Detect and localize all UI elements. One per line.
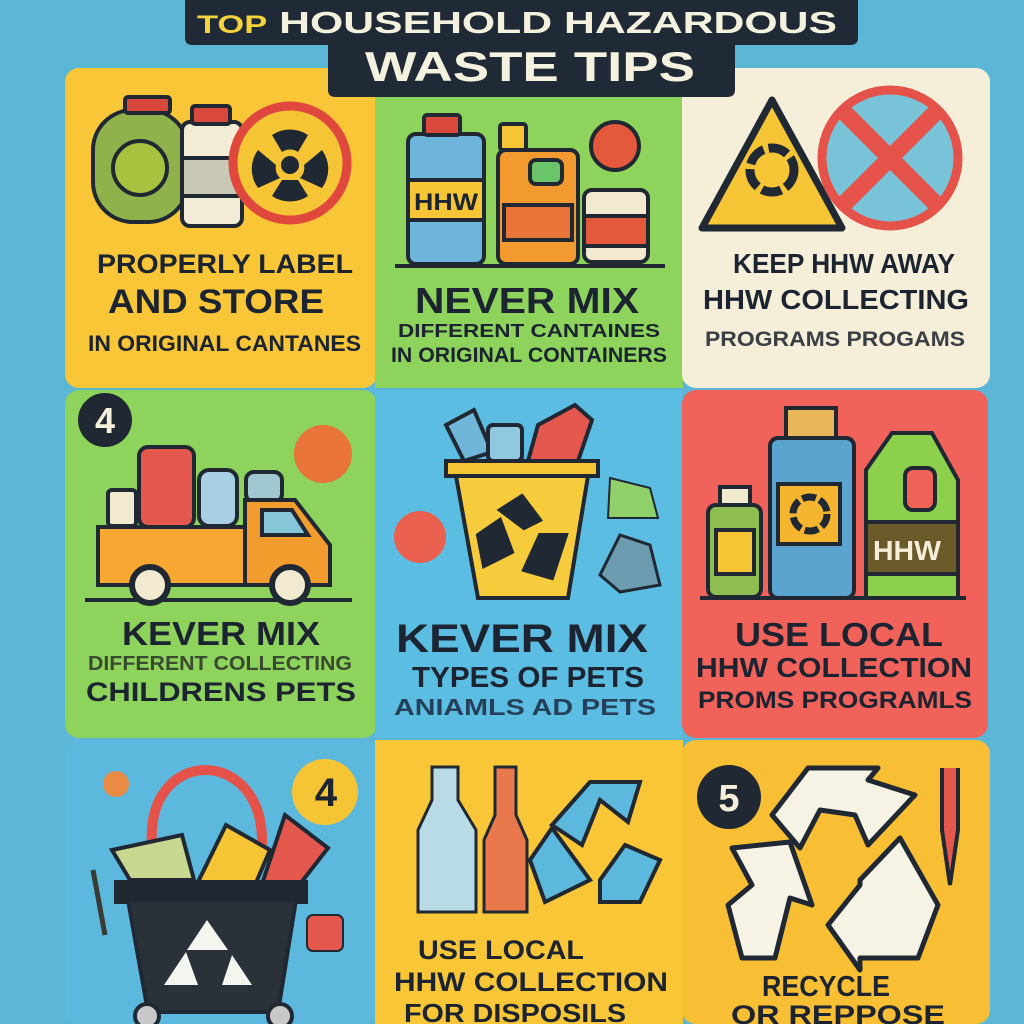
panel: use local programs [682,390,988,738]
icon: recycling arrows [530,782,660,902]
icon: bag [600,535,660,592]
icon: stick [93,870,105,935]
panel: use local collection [375,740,683,1024]
text: HHW collection: HHW COLLECTION [394,967,668,997]
badge: number 4: 4 [95,400,115,441]
icon: two bottles [418,767,527,912]
badge: number 4 [292,759,358,825]
text: programs: PROMS PROGRAMLS [698,687,972,714]
text: HHW collection: HHW COLLECTION [696,652,972,683]
heading: children's pets: CHILDRENS PETS [86,677,356,707]
heading: use local: USE LOCAL [735,616,943,653]
title: line two: WASTE TIPS [365,43,695,90]
text: programs: PROGRAMS PROGAMS [705,328,965,351]
panel: trash cart [65,740,377,1024]
title banner [185,0,858,97]
heading: properly label: PROPERLY LABEL [97,249,353,279]
icon: containers and biohazard sign [93,97,347,226]
panel: bin [375,390,683,738]
title: line one: TOP HOUSEHOLD HAZARDOUS [197,5,837,40]
heading: recycle: RECYCLE [762,971,890,1003]
icon: small red canister [307,915,343,951]
text: types of pets: TYPES OF PETS [412,662,644,694]
icon: truck with containers [85,447,352,603]
text: animals and pets: ANIAMLS AD PETS [394,694,656,720]
icon: recycling symbol on cart [164,920,252,985]
text: different collecting: DIFFERENT COLLECTING [88,653,352,675]
icon: large recycling arrows [728,768,938,970]
panel: never mix [375,68,683,388]
panel: properly label and store [65,68,377,388]
icon: bottles [700,408,966,598]
icon: warning triangle [702,100,842,228]
label: HHW on bottle: HHW [414,189,478,216]
icon: tools [942,768,958,885]
badge: number 4: 4 [315,771,338,815]
heading: and store: AND STORE [108,283,324,321]
icon: red circle [394,511,446,563]
panel: truck [65,390,377,738]
text: in original containers: IN ORIGINAL CANTANES [88,331,361,356]
panel: keep away [682,68,990,388]
badge: number 4 [78,393,132,447]
heading: never mix: KEVER MIX [396,617,648,661]
icon: HHW bottles [395,115,665,266]
icon: yellow recycling bin [446,405,598,598]
heading: keep away: KEEP HHW AWAY [733,248,955,279]
label: HHW on jug: HHW [873,535,942,566]
badge: number 5: 5 [718,778,740,820]
icon: orange dot [103,771,129,797]
icon: prohibition sign [822,90,958,226]
icon: cart with items [112,770,328,1024]
icon: green shape [608,478,658,518]
heading: never mix: KEVER MIX [122,615,320,652]
badge: number 5 [697,765,761,829]
heading: use local: USE LOCAL [418,935,584,965]
icon: small orange circle [294,425,352,483]
heading: never mix: NEVER MIX [415,280,639,321]
text: in original containers: IN ORIGINAL CONTAINERS [391,344,667,367]
text: different containers: DIFFERENT CANTAINES [398,321,660,341]
heading: HHW collecting: HHW COLLECTING [703,284,969,315]
panel: recycle or repurpose [682,740,990,1024]
